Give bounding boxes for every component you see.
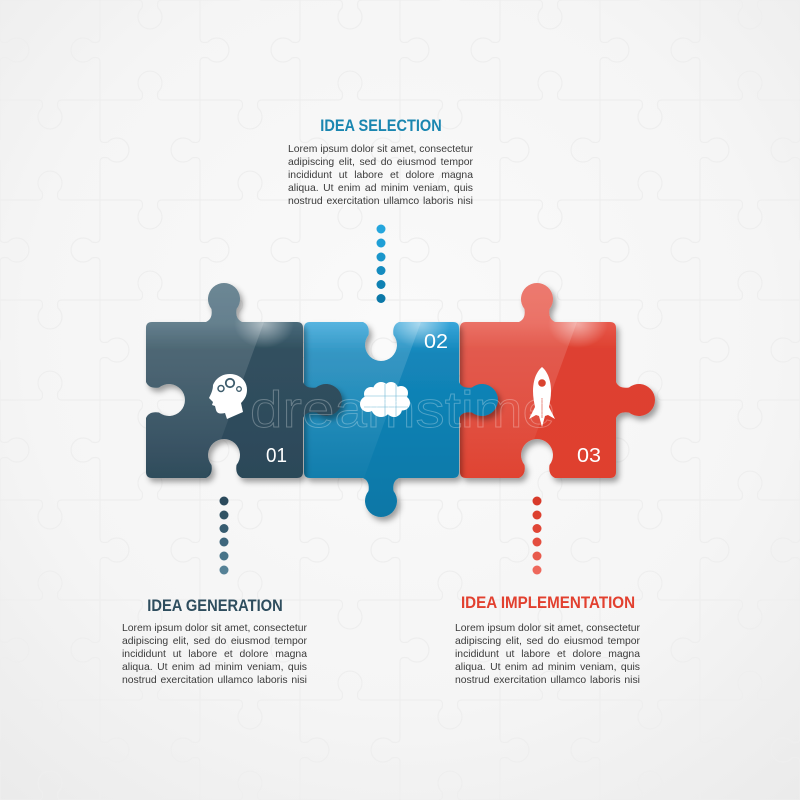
icon: puzzle brain (360, 382, 410, 417)
text block: idea generation: nostrud exercitation ullamco laboris nisi (122, 675, 307, 686)
text block: idea implementation: incididunt ut labore et dolore magna (455, 649, 640, 660)
text block: idea generation: incididunt ut labore et dolore magna (122, 649, 307, 660)
text block: idea implementation (455, 623, 640, 686)
heading: idea selection: IDEA SELECTION (320, 116, 442, 135)
text block: idea selection: adipiscing elit, sed do eiusmod tempor (288, 156, 473, 168)
puzzle piece 03: red (440, 270, 655, 478)
icon: head with gears (209, 374, 247, 419)
dotted connector: idea generation (220, 496, 228, 574)
dotted connector: idea selection (376, 224, 386, 303)
puzzle piece 02: blue (304, 322, 504, 524)
number 03: 03 (577, 445, 601, 467)
text block: idea generation: Lorem ipsum dolor sit amet, consectetur (122, 623, 307, 634)
dotted connector: idea implementation (532, 496, 542, 574)
watermark: dreamstime (250, 381, 555, 438)
text block: idea selection (288, 144, 474, 206)
text block: idea implementation: nostrud exercitation ullamco laboris nisi (455, 675, 640, 686)
text block: idea selection: Lorem ipsum dolor sit amet, consectetur (288, 144, 473, 154)
number 01: 01 (266, 445, 287, 467)
text block: idea selection: aliqua. Ut enim ad minim veniam, quis (288, 182, 473, 194)
heading: idea implementation: IDEA IMPLEMENTATION (461, 593, 635, 612)
text block: idea selection: nostrud exercitation ullamco laboris nisi (288, 196, 473, 206)
puzzle piece 01: dark slate (130, 270, 342, 478)
text block: idea implementation: aliqua. Ut enim ad minim veniam, quis (455, 662, 640, 673)
text block: idea selection: incididunt ut labore et dolore magna (288, 170, 473, 180)
text block: idea implementation: adipiscing elit, sed do eiusmod tempor (455, 636, 640, 647)
text block: idea generation: aliqua. Ut enim ad minim veniam, quis (122, 662, 307, 673)
heading: idea generation: IDEA GENERATION (147, 596, 283, 615)
text block: idea generation (122, 623, 308, 686)
number 02: 02 (424, 331, 448, 353)
icon: rocket (529, 367, 555, 427)
text block: idea implementation: Lorem ipsum dolor sit amet, consectetur (455, 623, 640, 634)
text block: idea generation: adipiscing elit, sed do eiusmod tempor (122, 636, 307, 647)
